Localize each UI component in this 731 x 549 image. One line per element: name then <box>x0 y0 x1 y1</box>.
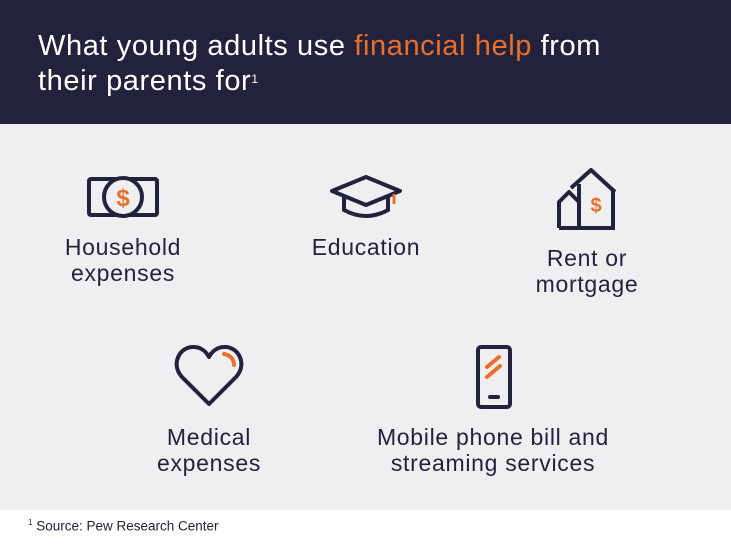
label: household: expenses <box>71 260 175 286</box>
header <box>0 0 731 124</box>
label: household: Household <box>65 234 181 260</box>
label: rent: Rent or <box>547 245 627 271</box>
icon: money <box>87 176 159 218</box>
icon: houses <box>557 168 616 230</box>
icon: graduation cap <box>330 175 402 218</box>
label: mobile: streaming services <box>391 450 595 476</box>
label: medical: expenses <box>157 450 261 476</box>
panel: items <box>0 124 731 510</box>
title: their parents for1 <box>38 65 259 97</box>
label: medical: Medical <box>167 424 251 450</box>
icon: heart <box>174 345 244 406</box>
title: What young adults use financial help from <box>38 30 601 62</box>
footnote: 1 Source: Pew Research Center <box>28 518 219 534</box>
icon: money: $ <box>116 185 130 212</box>
label: mobile <box>377 424 609 476</box>
icon: phone <box>476 345 512 409</box>
label: household <box>65 234 181 286</box>
label: rent <box>536 245 638 297</box>
icon: houses: $ <box>590 195 602 217</box>
label: education: Education <box>312 234 420 260</box>
label: medical <box>157 424 261 476</box>
label: mobile: Mobile phone bill and <box>377 424 609 450</box>
label: rent: mortgage <box>536 271 638 297</box>
title <box>38 30 601 97</box>
